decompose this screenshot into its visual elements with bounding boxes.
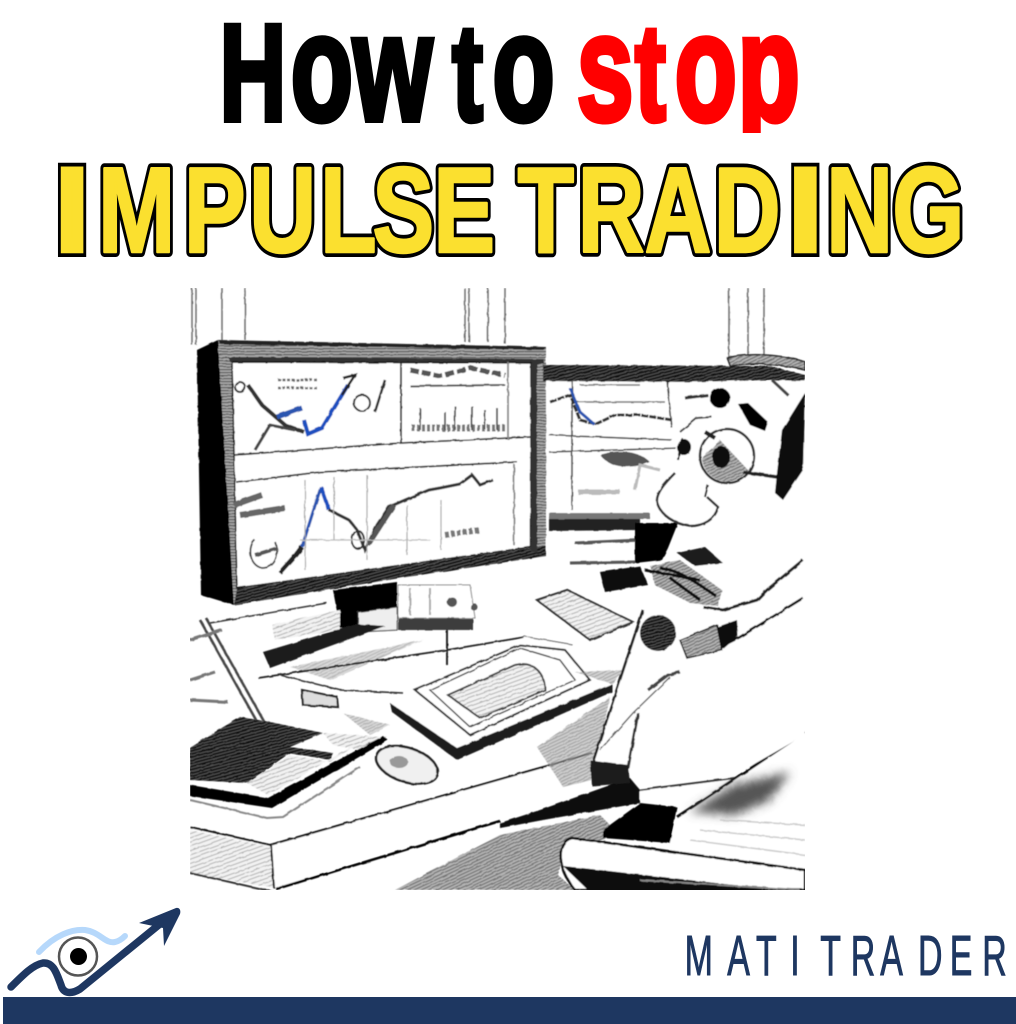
wristwatch	[640, 615, 738, 658]
center tray	[302, 637, 625, 760]
title line: How to stop: H	[220, 0, 286, 149]
glasses	[700, 429, 754, 483]
logo eye	[59, 938, 97, 976]
logo arrow	[11, 908, 180, 992]
title line: IMPULSE TRADING: I	[794, 151, 816, 269]
logo: eye and rising arrow	[11, 908, 180, 992]
cap	[727, 355, 805, 370]
upper left chart	[235, 375, 385, 450]
lower chart	[234, 475, 493, 573]
hair	[775, 393, 805, 500]
brand name: MATI TRADER	[685, 924, 1007, 987]
second monitor top bar	[543, 365, 805, 382]
small keyboard	[537, 590, 633, 640]
main monitor	[197, 340, 546, 605]
second monitor	[543, 366, 743, 563]
desk top and front	[190, 697, 610, 892]
title line: IMPULSE TRADING: MPULSE TRAD	[98, 142, 781, 278]
title line: IMPULSE TRADING: NG	[826, 142, 964, 278]
title line: IMPULSE TRADING: I	[61, 151, 83, 269]
logo light blue brow	[39, 930, 125, 952]
mouse	[374, 744, 440, 786]
window frame lines	[192, 288, 764, 360]
upper right chart	[410, 368, 505, 430]
trader neck	[635, 523, 678, 563]
chair	[500, 732, 805, 892]
title line: How to stop	[224, 22, 798, 133]
shirt collar sketch	[600, 566, 648, 592]
title line: IMPULSE TRADING: I	[61, 151, 83, 269]
footer bar	[3, 997, 1016, 1024]
trader body and arm	[590, 520, 805, 786]
eyebrows	[710, 388, 730, 408]
monitor stand	[210, 582, 572, 693]
title line: How to stop: t	[452, 0, 483, 149]
title line: IMPULSE TRADING: NG	[826, 142, 964, 278]
trader head	[543, 355, 805, 548]
floor shadow	[395, 815, 620, 890]
title line: IMPULSE TRADING: I	[794, 151, 816, 269]
illustration: trader sketch at desk with monitors	[190, 288, 805, 892]
title line: How to stop: t	[635, 0, 666, 149]
laptop	[190, 618, 388, 818]
title line: IMPULSE TRADING: MPULSE TRAD	[98, 142, 781, 278]
screen panels	[234, 362, 531, 545]
